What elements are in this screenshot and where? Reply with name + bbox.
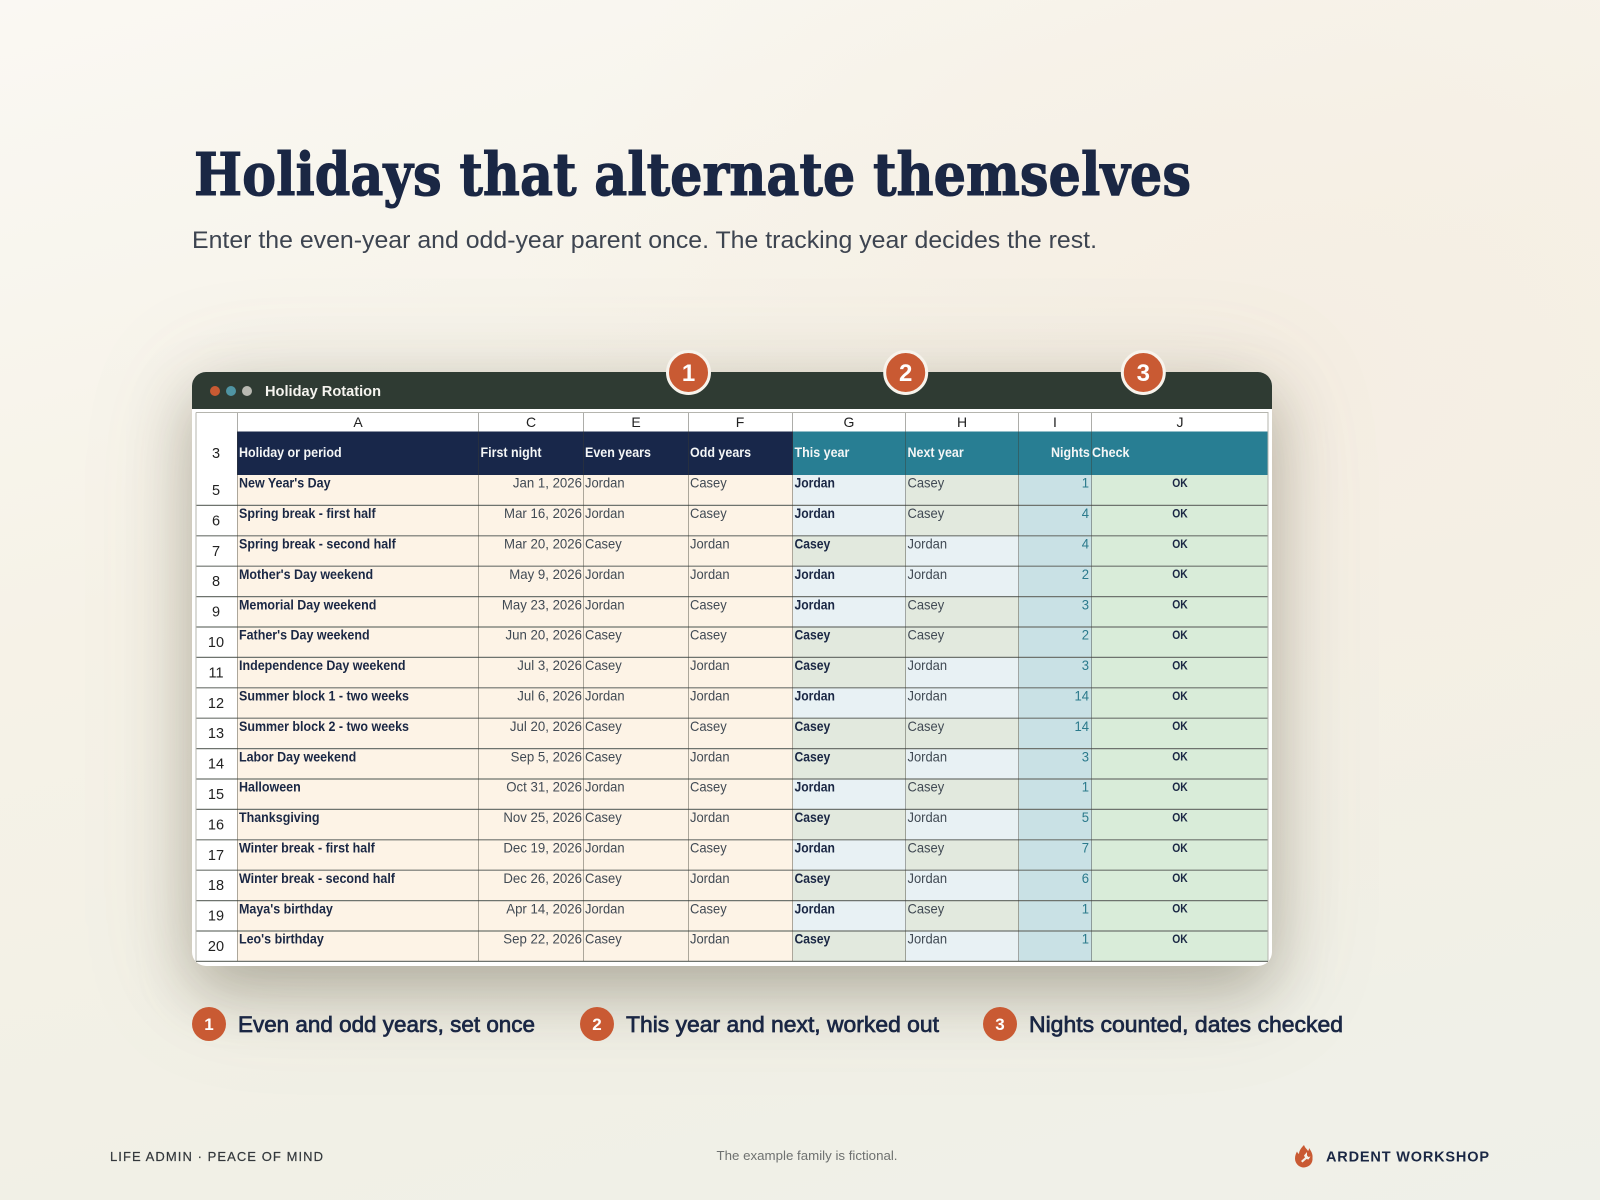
row: Memorial Day weekend: Jordan: [794, 597, 835, 612]
row: Summer block 2: OK: [1172, 721, 1188, 733]
row: Father's Day weekend: Father's Day weekend: [239, 627, 370, 643]
row: Summer block 2: Jul 20, 2026: [510, 719, 582, 734]
row: Summer block 2: Casey: [690, 719, 727, 734]
callout 2: [580, 1007, 939, 1041]
row: New Year's Day: 1: [1082, 476, 1089, 491]
row: Mother's Day weekend: Mother's Day weekend: [239, 566, 373, 582]
row: Memorial Day weekend: Casey: [907, 597, 945, 612]
row: Leo's birthday: [208, 931, 1188, 961]
row: Winter break second half: Dec 26, 2026: [503, 871, 582, 886]
callout 2: 2: [592, 1015, 602, 1034]
row: Thanksgiving: 16: [208, 817, 224, 833]
callout 3: 3: [995, 1015, 1005, 1034]
row: Summer block 1: Jordan: [794, 688, 835, 704]
row: Labor Day weekend: Casey: [585, 749, 622, 764]
row: Thanksgiving: Casey: [794, 809, 831, 825]
row: Labor Day weekend: 14: [208, 757, 224, 773]
row: Leo's birthday: Jordan: [907, 931, 947, 947]
row: Independence Day weekend: [208, 657, 1188, 688]
row: Spring break second half: Casey: [794, 536, 831, 552]
row: Mother's Day weekend: 8: [212, 574, 220, 590]
row: Independence Day weekend: Casey: [585, 658, 622, 673]
row: Halloween: Casey: [907, 779, 945, 795]
row: Spring break first half: Casey: [907, 506, 945, 521]
column fills: [237, 475, 1268, 961]
row: Labor Day weekend: Casey: [794, 749, 831, 764]
callout 1: Even and odd years, set once: [238, 1012, 535, 1037]
row: Winter break second half: OK: [1172, 873, 1188, 885]
callout 2: This year and next, worked out: [626, 1012, 939, 1037]
row: Summer block 2: Casey: [794, 718, 831, 734]
header row: Odd years: [690, 445, 751, 460]
row: Spring break second half: OK: [1172, 538, 1188, 551]
row: Spring break first half: Jordan: [794, 505, 835, 521]
row: Memorial Day weekend: OK: [1172, 599, 1188, 612]
row: Leo's birthday: 20: [208, 939, 224, 955]
row: Memorial Day weekend: 3: [1082, 597, 1089, 612]
row: Father's Day weekend: 10: [208, 635, 224, 651]
row: Winter break first half: OK: [1172, 842, 1188, 855]
row: Spring break first half: Spring break - first half: [239, 506, 376, 521]
row: Labor Day weekend: [208, 749, 1188, 779]
row: Leo's birthday: Jordan: [690, 931, 730, 947]
badge 1: 1: [682, 360, 695, 387]
row: Winter break first half: 17: [208, 848, 224, 864]
subtitle: Enter the even-year and odd-year parent once. The tracking year decides the rest.: [192, 227, 1097, 254]
row: Maya's birthday: Jordan: [794, 901, 835, 916]
column letters: A: [353, 414, 363, 430]
badge 2: 2: [899, 360, 912, 387]
panel: spreadsheet window: [192, 372, 1272, 966]
row: Winter break first half: 7: [1082, 840, 1089, 856]
row: Independence Day weekend: 11: [208, 665, 224, 681]
row: Winter break second half: Winter break - second half: [239, 870, 396, 886]
row: Independence Day weekend: Casey: [794, 657, 831, 673]
row: Mother's Day weekend: Jordan: [907, 567, 947, 582]
row: Summer block 1: Jordan: [907, 688, 947, 704]
row: Summer block 2: Summer block 2 - two weeks: [239, 718, 409, 734]
header row: This year: [794, 445, 849, 460]
row: Labor Day weekend: Jordan: [690, 749, 730, 764]
callout 1: [192, 1007, 535, 1041]
column letters: E: [631, 414, 641, 430]
row: Summer block 2: 13: [208, 726, 224, 742]
row: Summer block 1: 14: [1074, 688, 1089, 704]
row: Father's Day weekend: 2: [1082, 628, 1089, 643]
column letters: J: [1176, 414, 1184, 430]
row: Spring break first half: Casey: [690, 506, 727, 521]
row: Maya's birthday: Maya's birthday: [239, 901, 334, 916]
row: Thanksgiving: Thanksgiving: [239, 810, 320, 825]
window title bar: [192, 372, 1272, 409]
callout 1: 1: [204, 1015, 214, 1034]
row: Father's Day weekend: Casey: [794, 627, 831, 643]
row: New Year's Day: Jan 1, 2026: [513, 476, 582, 491]
row: Maya's birthday: Jordan: [585, 901, 625, 916]
row: Memorial Day weekend: Jordan: [585, 597, 625, 612]
row: Maya's birthday: Casey: [690, 901, 727, 916]
row: Winter break first half: Jordan: [585, 840, 625, 856]
row: Memorial Day weekend: 9: [212, 605, 220, 621]
row: Spring break second half: 4: [1082, 536, 1089, 552]
header row: [212, 432, 1268, 475]
row: Summer block 1: Jordan: [585, 688, 625, 704]
row: Summer block 1: Jul 6, 2026: [517, 688, 582, 704]
row: Halloween: Jordan: [585, 779, 625, 795]
row: Summer block 2: [208, 718, 1188, 749]
callout 3: Nights counted, dates checked: [1029, 1012, 1343, 1037]
row: Mother's Day weekend: 2: [1082, 567, 1089, 582]
row: Winter break second half: Jordan: [907, 871, 947, 886]
row: Mother's Day weekend: Jordan: [690, 567, 730, 582]
row: Mother's Day weekend: Jordan: [794, 566, 835, 582]
row: Leo's birthday: Casey: [585, 931, 622, 947]
row: Labor Day weekend: OK: [1172, 751, 1188, 764]
badge 1: [668, 352, 710, 394]
row: Spring break second half: Jordan: [907, 536, 947, 552]
row: Halloween: [208, 779, 1188, 809]
row: Halloween: OK: [1172, 781, 1188, 794]
row: New Year's Day: Jordan: [585, 475, 625, 491]
row: Thanksgiving: 5: [1082, 810, 1089, 825]
row: Thanksgiving: OK: [1172, 812, 1188, 825]
window body: [192, 372, 1272, 966]
icon: window dots: [210, 386, 252, 396]
row: Memorial Day weekend: Memorial Day weekend: [239, 597, 376, 612]
row: New Year's Day: Casey: [690, 475, 727, 491]
row: Winter break second half: 18: [208, 878, 224, 894]
row: Winter break first half: Casey: [690, 840, 727, 856]
row: New Year's Day: Casey: [907, 475, 945, 491]
row: Father's Day weekend: Jun 20, 2026: [506, 628, 582, 643]
row: Thanksgiving: [208, 809, 1188, 840]
row: Summer block 1: Summer block 1 - two weeks: [239, 688, 409, 704]
row: Winter break second half: [208, 870, 1188, 901]
row: Maya's birthday: [208, 901, 1188, 931]
row: Father's Day weekend: Casey: [585, 627, 622, 643]
header row: Even years: [585, 445, 651, 460]
row: Leo's birthday: OK: [1172, 933, 1188, 946]
row: New Year's Day: New Year's Day: [239, 475, 331, 491]
row: Leo's birthday: 1: [1082, 932, 1089, 947]
row: Maya's birthday: Apr 14, 2026: [506, 901, 582, 916]
row: Summer block 1: OK: [1172, 690, 1188, 703]
column letters: H: [957, 414, 967, 430]
title: Holidays that alternate themselves: [194, 140, 1191, 209]
row: Maya's birthday: 19: [208, 909, 224, 925]
row: Leo's birthday: Sep 22, 2026: [503, 932, 582, 947]
row: Mother's Day weekend: OK: [1172, 569, 1188, 581]
row: Maya's birthday: OK: [1172, 903, 1188, 916]
row: Father's Day weekend: [208, 627, 1188, 657]
row: Spring break second half: Jordan: [690, 536, 730, 552]
row: Winter break second half: Casey: [585, 871, 622, 886]
row: Father's Day weekend: Casey: [690, 627, 727, 643]
row: Memorial Day weekend: Casey: [690, 597, 727, 612]
row: Spring break second half: [212, 536, 1188, 566]
row: Winter break first half: Winter break - first half: [239, 840, 375, 856]
row: Winter break first half: Dec 19, 2026: [503, 840, 582, 856]
row: Maya's birthday: Casey: [907, 901, 945, 916]
row: Winter break second half: 6: [1082, 871, 1089, 886]
row: Halloween: Oct 31, 2026: [506, 780, 582, 795]
row: Winter break second half: Jordan: [690, 871, 730, 886]
row: Thanksgiving: Casey: [585, 810, 622, 825]
row: Labor Day weekend: Jordan: [907, 749, 947, 764]
row: Labor Day weekend: Sep 5, 2026: [511, 749, 582, 764]
row: Spring break first half: [212, 505, 1188, 536]
row: Mother's Day weekend: May 9, 2026: [509, 567, 582, 582]
row: Spring break second half: Casey: [585, 536, 622, 552]
row: Thanksgiving: Jordan: [690, 810, 730, 825]
row: Independence Day weekend: Independence Day weekend: [239, 658, 406, 673]
badge 2: [885, 352, 927, 394]
header row: Holiday or period: [239, 445, 342, 460]
header row: 3: [212, 446, 220, 462]
row: Independence Day weekend: Jordan: [690, 658, 730, 673]
row: Thanksgiving: Nov 25, 2026: [503, 810, 582, 825]
row: Spring break first half: 6: [212, 513, 220, 529]
row: Spring break second half: 7: [212, 544, 220, 560]
row: Summer block 2: 14: [1074, 719, 1089, 734]
row: Labor Day weekend: Labor Day weekend: [239, 749, 356, 764]
row: Mother's Day weekend: Jordan: [585, 567, 625, 582]
row: Summer block 2: Casey: [907, 719, 945, 734]
header row: Check: [1092, 445, 1130, 460]
row: Spring break first half: 4: [1082, 506, 1089, 521]
row: Winter break second half: Casey: [794, 870, 831, 886]
row: Father's Day weekend: Casey: [907, 627, 945, 643]
row: New Year's Day: Jordan: [794, 475, 835, 491]
row: Labor Day weekend: 3: [1082, 749, 1089, 764]
row: Spring break first half: OK: [1172, 508, 1188, 521]
row: Halloween: Halloween: [239, 779, 301, 795]
row: Summer block 2: Casey: [585, 719, 622, 734]
footer note: The example family is fictional.: [716, 1148, 898, 1163]
row: Independence Day weekend: 3: [1082, 658, 1089, 673]
row: Winter break first half: Jordan: [794, 840, 835, 856]
badge 3: [1122, 352, 1164, 394]
row: Halloween: Jordan: [794, 779, 835, 795]
row: New Year's Day: 5: [212, 483, 220, 499]
icon: flame with wrench: [1295, 1145, 1313, 1168]
row: Father's Day weekend: OK: [1172, 629, 1188, 642]
header row: Next year: [907, 445, 964, 460]
row: Halloween: 1: [1082, 780, 1089, 795]
column letters: G: [844, 414, 854, 430]
row: Mother's Day weekend: [212, 566, 1188, 597]
header row: First night: [480, 445, 542, 460]
row: Winter break first half: Casey: [907, 840, 945, 856]
badge 3: 3: [1137, 360, 1150, 387]
row: Summer block 1: Jordan: [690, 688, 730, 704]
row: New Year's Day: [212, 475, 1188, 505]
footer brand: ARDENT WORKSHOP: [1326, 1150, 1489, 1166]
row: Independence Day weekend: OK: [1172, 660, 1188, 673]
window title: Holiday Rotation: [265, 383, 381, 400]
column letters: C: [526, 414, 536, 430]
footer left: LIFE ADMIN · PEACE OF MIND: [110, 1149, 323, 1164]
row: Memorial Day weekend: May 23, 2026: [502, 597, 582, 612]
row: Summer block 1: 12: [208, 696, 224, 712]
row: Maya's birthday: 1: [1082, 901, 1089, 916]
row: Summer block 1: [208, 688, 1188, 718]
row: Independence Day weekend: Jordan: [907, 658, 947, 673]
row: Spring break second half: Mar 20, 2026: [504, 536, 582, 552]
row: Winter break first half: [208, 840, 1188, 870]
header row: Nights: [1051, 445, 1090, 460]
row: Thanksgiving: Jordan: [907, 810, 947, 825]
row: Spring break second half: Spring break - second half: [239, 536, 396, 552]
row: Halloween: 15: [208, 787, 224, 803]
row: Spring break first half: Jordan: [585, 506, 625, 521]
column letters: [196, 412, 1268, 432]
row: Leo's birthday: Casey: [794, 931, 831, 947]
row: New Year's Day: OK: [1172, 477, 1188, 490]
callout 3: [983, 1007, 1343, 1041]
column letters: F: [736, 414, 744, 430]
row: Spring break first half: Mar 16, 2026: [504, 506, 582, 521]
row: Halloween: Casey: [690, 779, 727, 795]
row: Memorial Day weekend: [212, 597, 1188, 627]
row: Leo's birthday: Leo's birthday: [239, 931, 325, 947]
column letters: I: [1053, 414, 1057, 430]
row: Independence Day weekend: Jul 3, 2026: [517, 658, 582, 673]
